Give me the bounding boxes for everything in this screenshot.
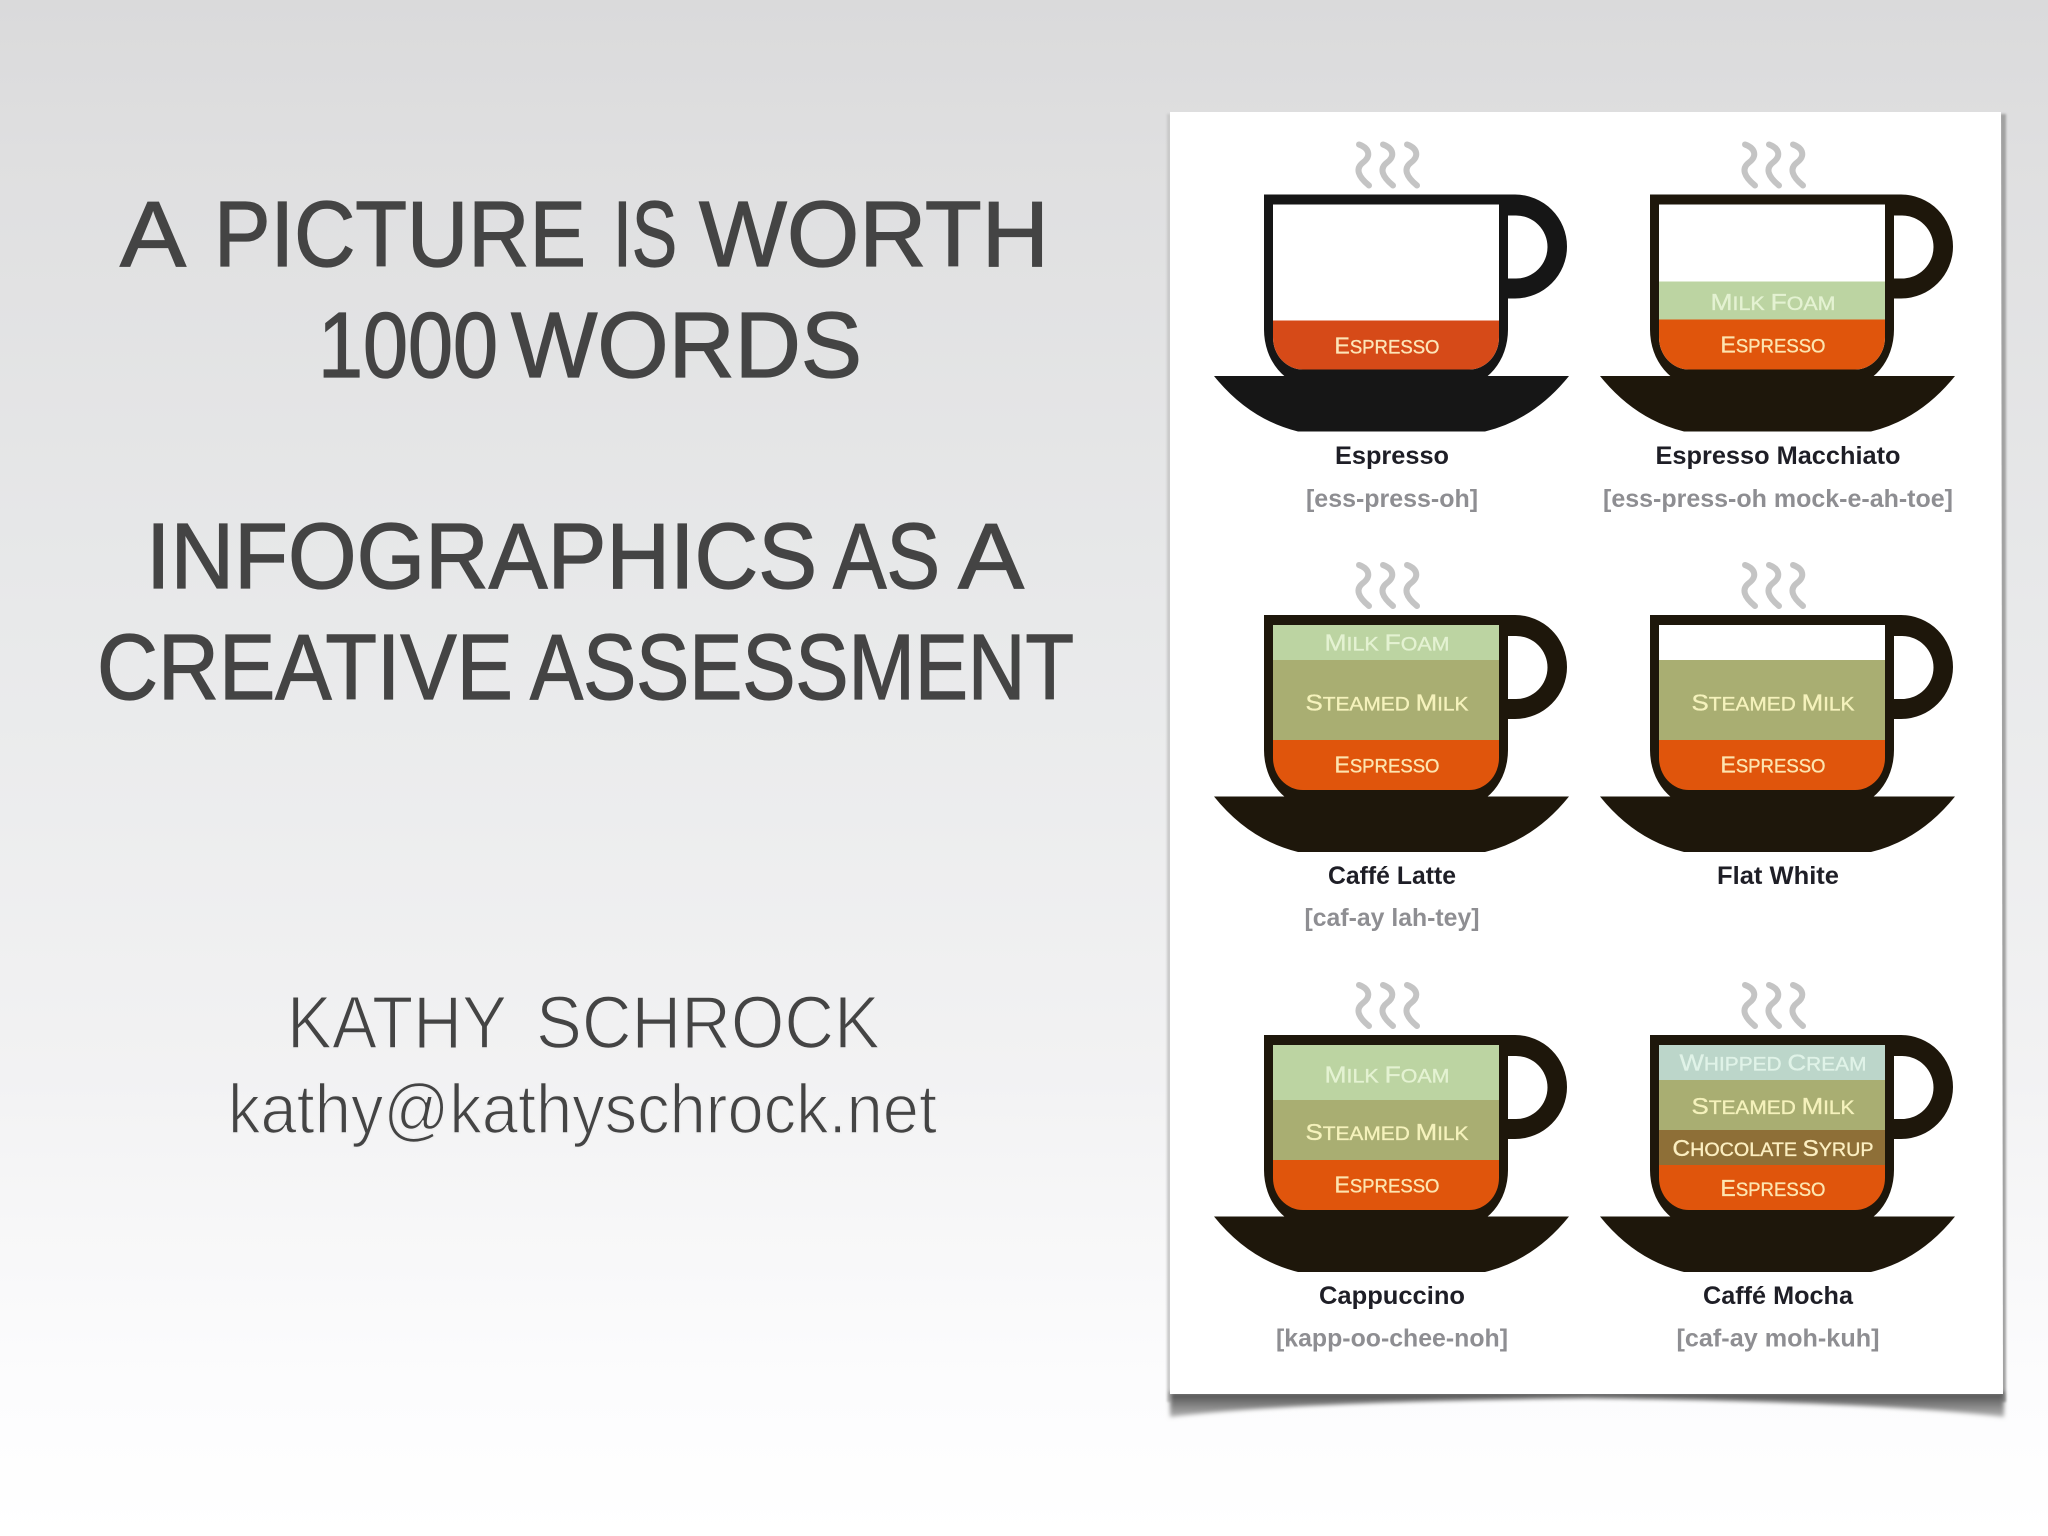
cup interior [1659,1045,1885,1210]
pronunciation: espresso: [ess-press-oh] [1306,485,1478,513]
cup interior: ESPRESSO [1720,752,1826,778]
cup interior: MILK FOAM [1710,289,1836,315]
steam [1358,985,1417,1026]
cup: espresso macchiato [1600,144,1955,513]
cup interior [1273,204,1499,370]
author credit: kathy@kathyschrock.net [228,1070,937,1148]
label: cappuccino: Cappuccino [1319,1282,1465,1310]
cup and saucer [1214,1035,1569,1272]
cup: espresso [1214,144,1569,513]
cup interior: STEAMED MILK [1306,690,1469,716]
heading: infographics as a creative assessment: AS [833,504,940,608]
steam [1744,144,1803,186]
label: caffe mocha: Caffé Mocha [1703,1282,1854,1310]
cup: cappuccino [1214,985,1569,1352]
heading: infographics as a creative assessment [97,504,1074,719]
cup interior: ESPRESSO [1720,1175,1826,1201]
panel paper [1170,112,2003,1394]
cup interior [1273,1045,1499,1210]
heading: infographics as a creative assessment: INFOGRAPHICS [146,504,817,608]
cup interior: WHIPPED CREAM [1680,1050,1867,1076]
cup interior [1659,204,1885,370]
label: flat white: Flat White [1717,862,1839,890]
pronunciation: cappuccino: [kapp-oo-chee-noh] [1276,1324,1508,1352]
steam [1744,985,1803,1026]
cup interior: STEAMED MILK [1692,1093,1855,1119]
cup: caffe mocha [1600,985,1955,1352]
cup interior: ESPRESSO [1334,752,1440,778]
steam [1358,144,1417,186]
cup interior: CHOCOLATE SYRUP [1672,1135,1873,1161]
author credit [228,981,937,1148]
heading: a picture is worth 1000 words: IS [613,182,677,286]
cup interior [1659,625,1885,790]
heading: infographics as a creative assessment: ASSESSMENT [530,615,1074,719]
cup interior: STEAMED MILK [1692,690,1855,716]
cup interior: MILK FOAM [1324,630,1450,656]
cup: flat white [1600,565,1955,890]
heading: a picture is worth 1000 words: 1000 [318,293,498,397]
heading: infographics as a creative assessment: CREATIVE [97,615,513,719]
author credit: KATHY [287,981,507,1064]
pronunciation: espresso macchiato: [ess-press-oh mock-e-ah-toe] [1603,485,1953,513]
heading: a picture is worth 1000 words: WORTH [699,182,1049,286]
cup and saucer [1600,1035,1955,1272]
label: espresso: Espresso [1335,442,1449,470]
panel: coffee drinks infographic [1167,112,2006,1417]
heading: infographics as a creative assessment: A [958,504,1024,608]
cup interior [1273,625,1499,790]
cup interior: STEAMED MILK [1306,1119,1469,1145]
cup interior: ESPRESSO [1334,332,1440,358]
steam [1358,565,1417,606]
heading: a picture is worth 1000 words: A [120,182,186,286]
cup: caffe latte [1214,565,1569,932]
cup and saucer [1600,615,1955,852]
heading: a picture is worth 1000 words: WORDS [511,293,862,397]
label: caffe latte: Caffé Latte [1328,862,1456,890]
cup interior: ESPRESSO [1334,1172,1440,1198]
steam [1744,565,1803,606]
pronunciation: caffe mocha: [caf-ay moh-kuh] [1676,1324,1880,1352]
cup interior: ESPRESSO [1720,332,1826,358]
cup and saucer [1214,194,1569,432]
cup and saucer [1600,194,1955,432]
heading: a picture is worth 1000 words: PICTURE [214,182,586,286]
heading: a picture is worth 1000 words [120,182,1049,397]
author credit: SCHROCK [536,981,880,1064]
panel shadow [1167,114,2006,1417]
pronunciation: caffe latte: [caf-ay lah-tey] [1304,904,1480,932]
label: espresso macchiato: Espresso Macchiato [1656,442,1900,470]
cup and saucer [1214,615,1569,852]
cup interior: MILK FOAM [1324,1062,1450,1088]
